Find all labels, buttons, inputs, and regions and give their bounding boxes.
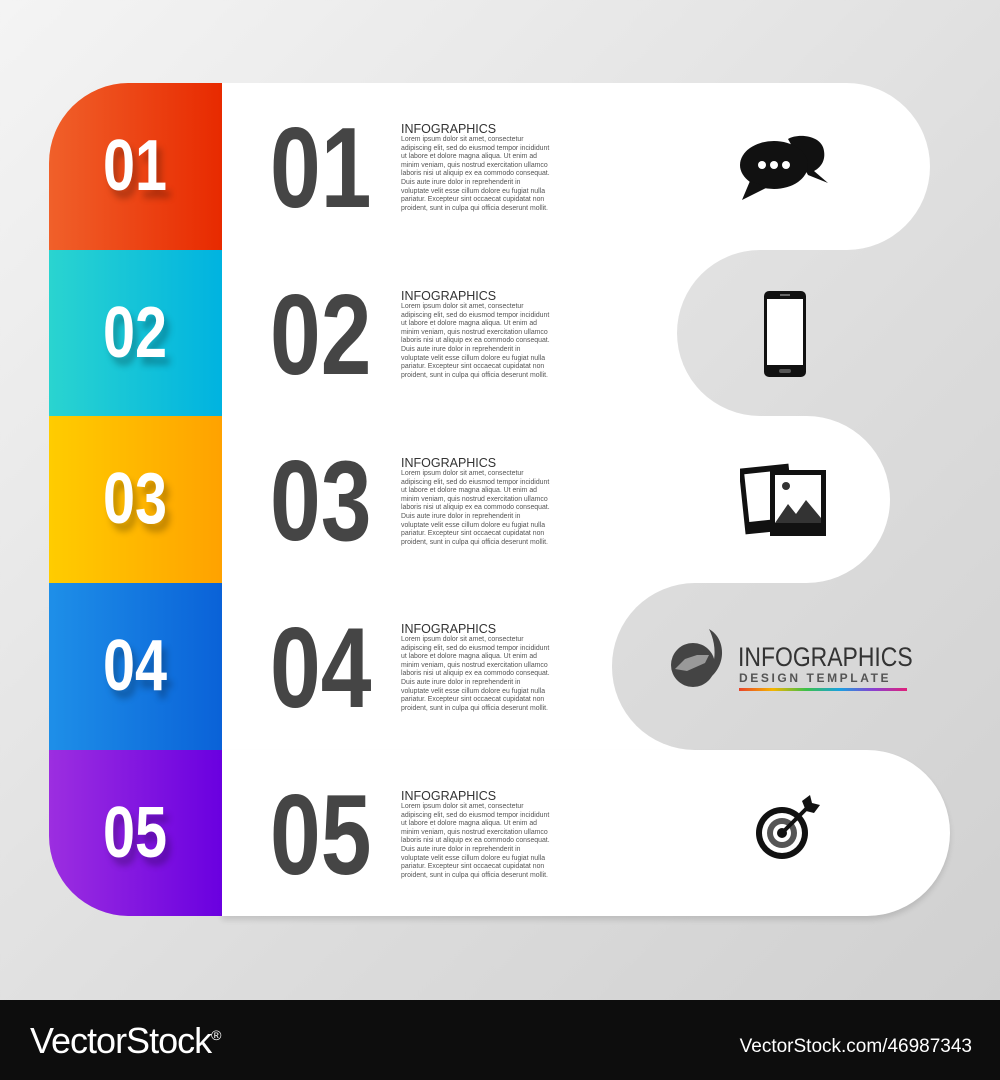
white row 1: [222, 83, 930, 250]
left number 05: 05: [103, 793, 168, 873]
big number 03: 03: [270, 438, 371, 565]
footer bar: VectorStock.com/46987343: [740, 1036, 972, 1057]
left number 01: 01: [103, 126, 168, 206]
logo: infographics design template: INFOGRAPHICS: [738, 642, 913, 672]
text block 3: Lorem ipsum dolor sit amet, consectetur adipiscing elit, sed do eiusmod tempor incididunt ut labore et dolore magna aliqua. Ut enim ad minim veniam, quis nostrud exercitation ullamco laboris nisi ut aliquip ex ea commodo consequat. Duis aute irure dolor in reprehenderit in voluptate velit esse cillum dolore eu fugiat nulla pariatur. Excepteur sint occaecat cupidatat non proident, sunt in culpa qui officia deserunt mollit.: [401, 470, 550, 546]
icon: chat bubbles: [740, 136, 828, 200]
gray pill row 2: [677, 250, 1000, 416]
text block 1: Lorem ipsum dolor sit amet, consectetur adipiscing elit, sed do eiusmod tempor incididunt ut labore et dolore magna aliqua. Ut enim ad minim veniam, quis nostrud exercitation ullamco laboris nisi ut aliquip ex ea commodo consequat. Duis aute irure dolor in reprehenderit in voluptate velit esse cillum dolore eu fugiat nulla pariatur. Excepteur sint occaecat cupidatat non proident, sunt in culpa qui officia deserunt mollit.: [401, 136, 550, 212]
text block 2: INFOGRAPHICS: [401, 289, 496, 303]
big number 01: 01: [270, 105, 371, 232]
left number 03: 03: [103, 459, 168, 539]
text block 5: Lorem ipsum dolor sit amet, consectetur adipiscing elit, sed do eiusmod tempor incididunt ut labore et dolore magna aliqua. Ut enim ad minim veniam, quis nostrud exercitation ullamco laboris nisi ut aliquip ex ea commodo consequat. Duis aute irure dolor in reprehenderit in voluptate velit esse cillum dolore eu fugiat nulla pariatur. Excepteur sint occaecat cupidatat non proident, sunt in culpa qui officia deserunt mollit.: [401, 803, 550, 879]
white row 5: [222, 750, 950, 916]
logo: infographics design template: DESIGN TEMPLATE: [739, 671, 891, 685]
left number 04: 04: [103, 626, 168, 706]
icon: smartphone: [764, 291, 806, 377]
text block 4: Lorem ipsum dolor sit amet, consectetur adipiscing elit, sed do eiusmod tempor incididunt ut labore et dolore magna aliqua. Ut enim ad minim veniam, quis nostrud exercitation ullamco laboris nisi ut aliquip ex ea commodo consequat. Duis aute irure dolor in reprehenderit in voluptate velit esse cillum dolore eu fugiat nulla pariatur. Excepteur sint occaecat cupidatat non proident, sunt in culpa qui officia deserunt mollit.: [401, 636, 550, 712]
left colored column: [49, 83, 222, 916]
text block 2: Lorem ipsum dolor sit amet, consectetur adipiscing elit, sed do eiusmod tempor incididunt ut labore et dolore magna aliqua. Ut enim ad minim veniam, quis nostrud exercitation ullamco laboris nisi ut aliquip ex ea commodo consequat. Duis aute irure dolor in reprehenderit in voluptate velit esse cillum dolore eu fugiat nulla pariatur. Excepteur sint occaecat cupidatat non proident, sunt in culpa qui officia deserunt mollit.: [401, 303, 550, 379]
text block 5: INFOGRAPHICS: [401, 789, 496, 803]
text block 1: INFOGRAPHICS: [401, 122, 496, 136]
white panel rows: [222, 249, 782, 417]
icon: photos: [740, 464, 826, 536]
text block 4: INFOGRAPHICS: [401, 622, 496, 636]
footer bar: [0, 1000, 1000, 1080]
white row 3: [222, 416, 890, 583]
left number 02: 02: [103, 293, 168, 373]
big number 04: 04: [270, 605, 371, 732]
big number 05: 05: [270, 772, 371, 899]
icon: target: [756, 795, 820, 859]
logo: infographics design template: [671, 629, 913, 691]
gray pill row 4: [612, 583, 1000, 750]
text block 3: INFOGRAPHICS: [401, 456, 496, 470]
footer bar: VectorStock®: [30, 1020, 220, 1061]
big number 02: 02: [270, 272, 371, 399]
